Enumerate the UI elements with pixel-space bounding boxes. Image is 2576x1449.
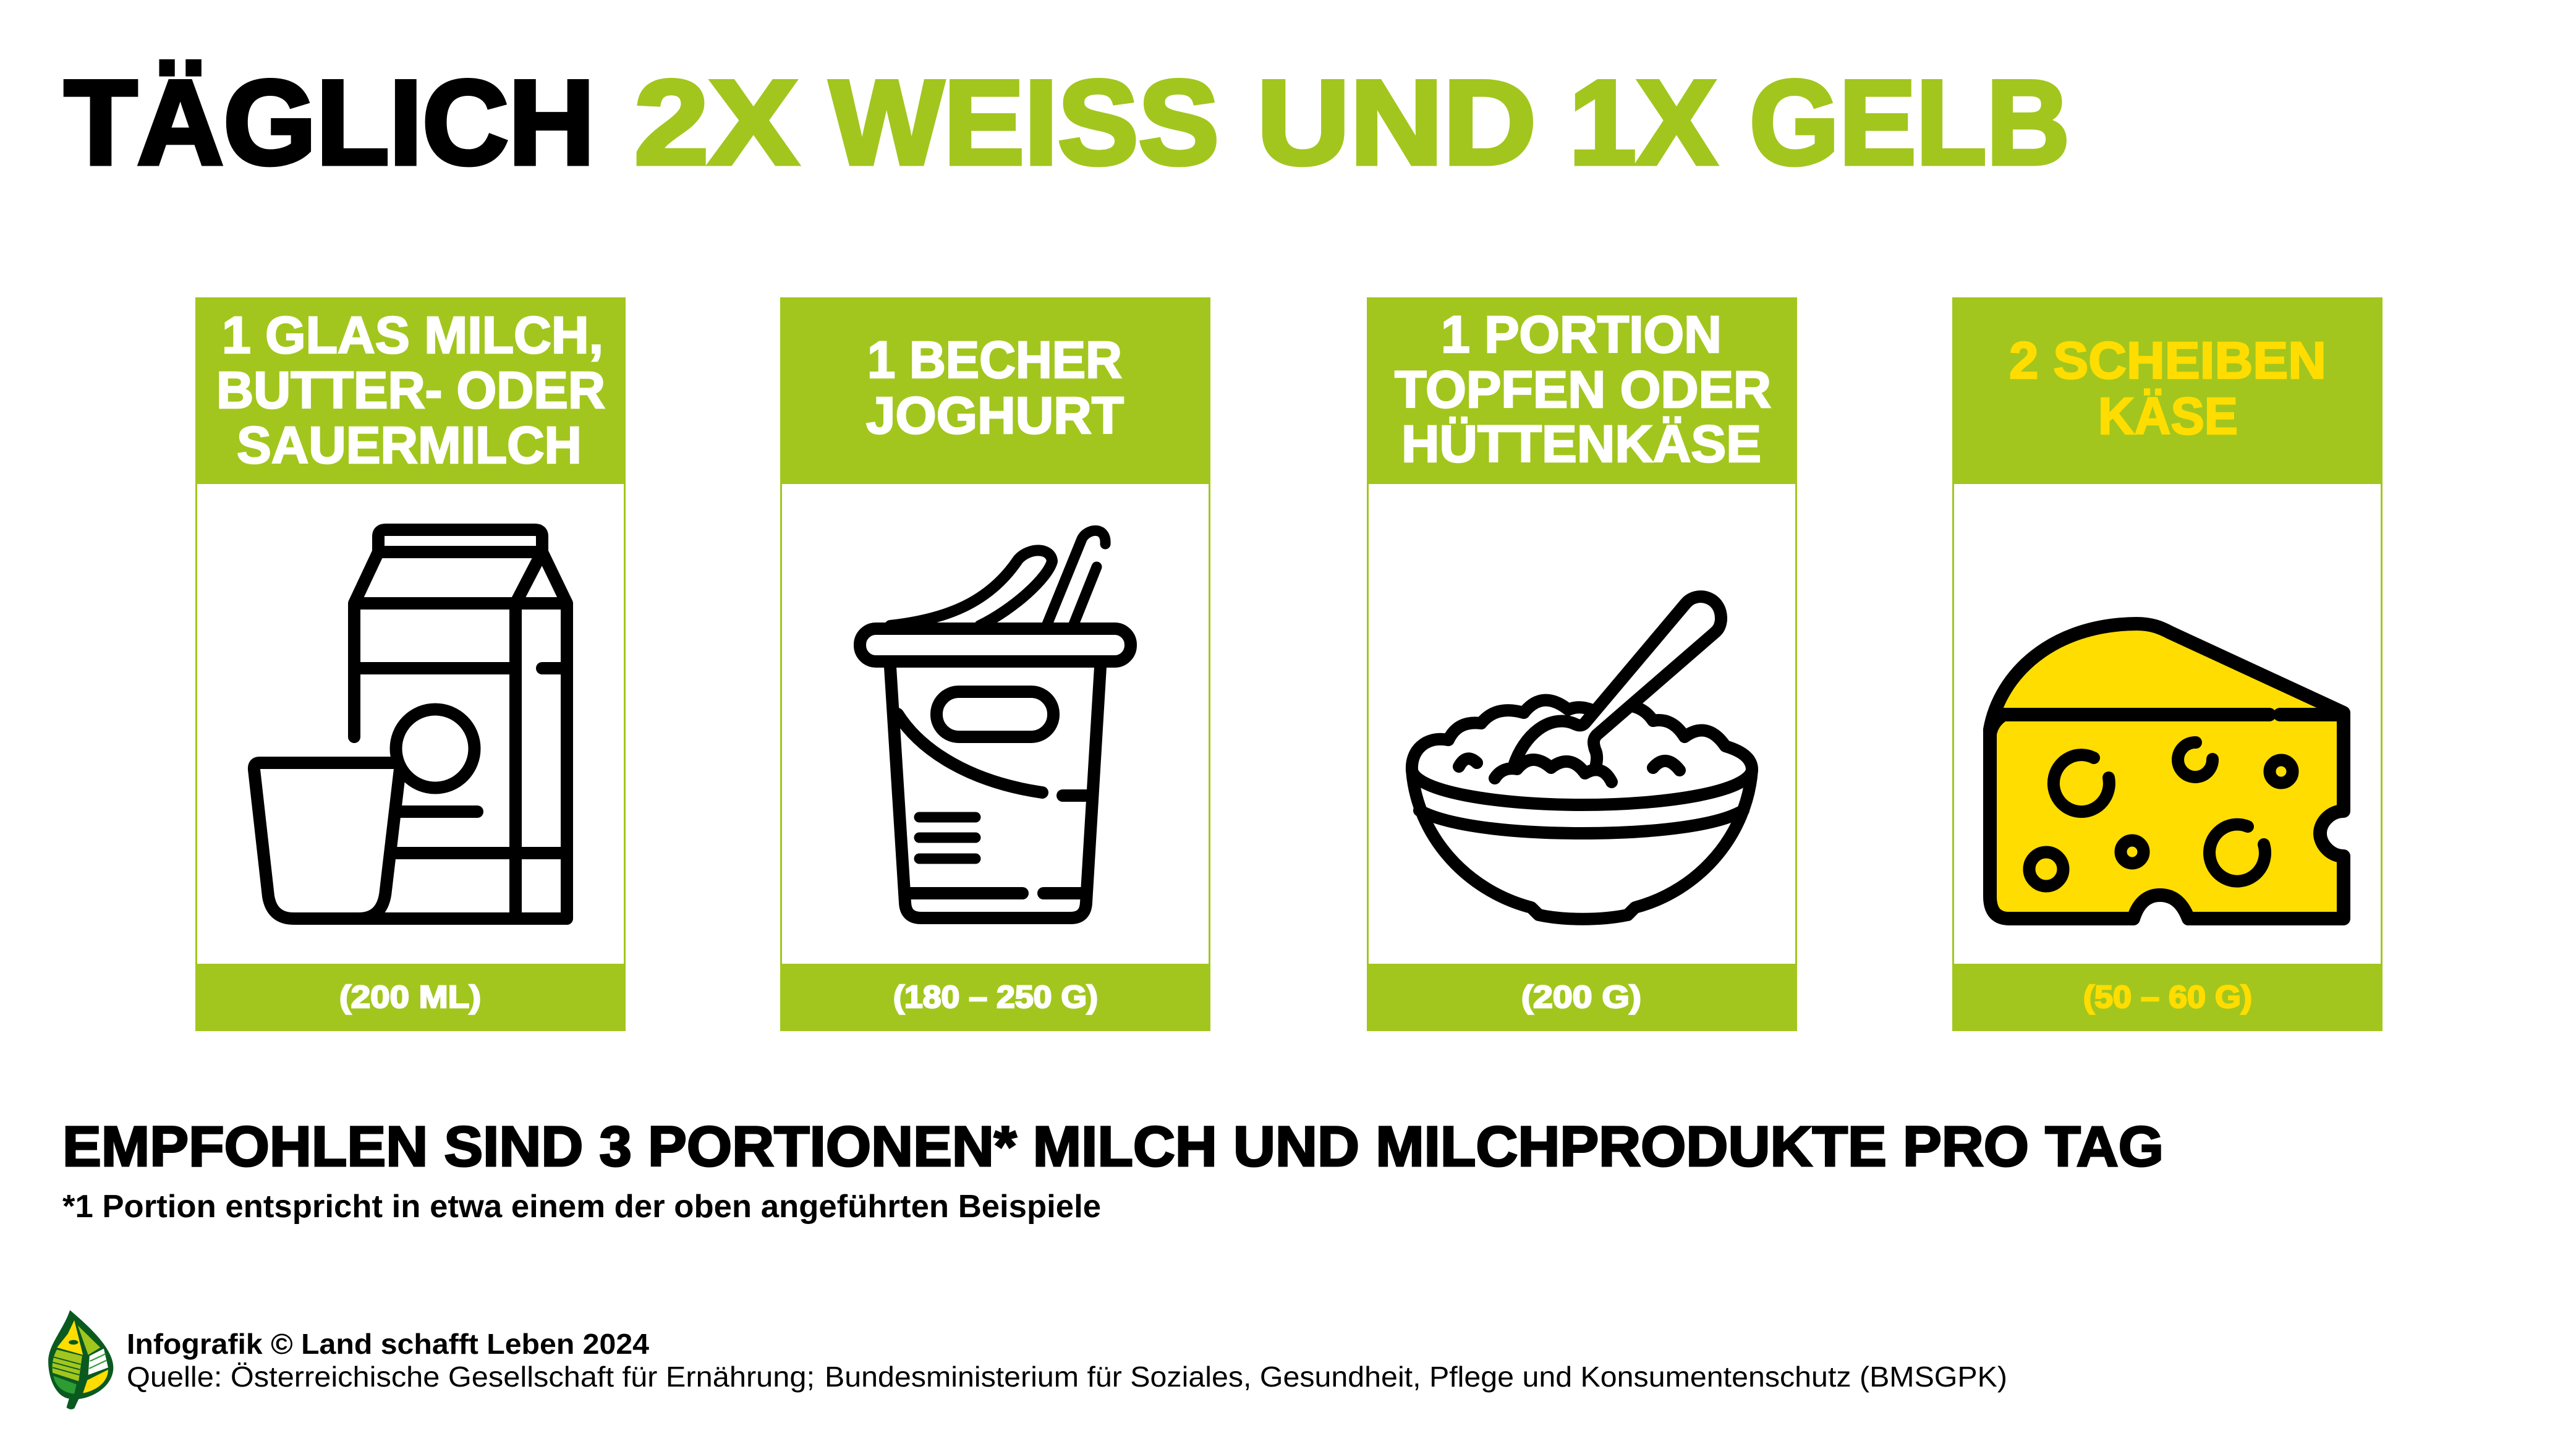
- footer: milk amount: (200 ML): [339, 979, 481, 1014]
- footer: curd amount: [1367, 964, 1797, 1031]
- header: yoghurt: [780, 297, 1210, 484]
- header: curd: 1 PORTION: [1441, 305, 1722, 363]
- icon: bowl with spoon: [1412, 597, 1752, 919]
- header: milk: 1 GLAS MILCH,: [222, 306, 603, 364]
- source line: Quelle: Österreichische Gesellschaft für Ernährung;: [127, 1361, 815, 1393]
- icon: cheese wedge: [1990, 624, 2344, 919]
- footer: cheese amount: [1952, 964, 2383, 1031]
- panel: curd: [1367, 297, 1797, 1031]
- icon: leaf logo: [48, 1310, 113, 1409]
- credit line: Infografik © Land schafft Leben 2024: [127, 1328, 649, 1360]
- panel: milk: [195, 297, 626, 1031]
- title: 1X: [1569, 56, 1717, 190]
- source line: Bundesministerium für Soziales, Gesundheit, Pflege und Konsumentenschutz (BMSGPK): [825, 1361, 2007, 1393]
- header: yoghurt: JOGHURT: [866, 386, 1124, 444]
- header: curd: HÜTTENKÄSE: [1401, 415, 1761, 473]
- panel: yoghurt: [780, 297, 1210, 1031]
- title: TÄGLICH: [64, 56, 595, 190]
- header: yoghurt: 1 BECHER: [867, 331, 1122, 389]
- header: cheese: [1952, 297, 2383, 484]
- header: milk: BUTTER- ODER: [216, 361, 605, 419]
- footer: yoghurt amount: [780, 964, 1210, 1031]
- header: curd: TOPFEN ODER: [1395, 360, 1771, 419]
- footer: cheese amount: (50 – 60 G): [2083, 979, 2252, 1014]
- footer: milk amount: [195, 964, 626, 1031]
- recommendation heading: EMPFOHLEN SIND 3 PORTIONEN* MILCH UND MILCHPRODUKTE PRO TAG: [62, 1115, 2164, 1178]
- icon: milk carton and glass: [254, 530, 567, 919]
- title: GELB: [1749, 56, 2070, 190]
- header: milk: [195, 297, 626, 484]
- header: cheese: KÄSE: [2098, 387, 2238, 445]
- title: 2X: [634, 56, 798, 190]
- footer: yoghurt amount: (180 – 250 G): [893, 979, 1098, 1014]
- footer: curd amount: (200 G): [1521, 979, 1641, 1014]
- footnote: *1 Portion entspricht in etwa einem der oben angeführten Beispiele: [62, 1189, 1101, 1225]
- icon: yoghurt cup: [860, 530, 1131, 918]
- header: milk: SAUERMILCH: [237, 416, 582, 474]
- header: curd: [1367, 297, 1797, 484]
- title: WEISS: [830, 56, 1219, 190]
- title: UND: [1257, 56, 1536, 190]
- header: cheese: 2 SCHEIBEN: [2009, 331, 2326, 389]
- panel: cheese: [1952, 297, 2383, 1031]
- title: [64, 56, 2070, 190]
- source line: [127, 1361, 2007, 1393]
